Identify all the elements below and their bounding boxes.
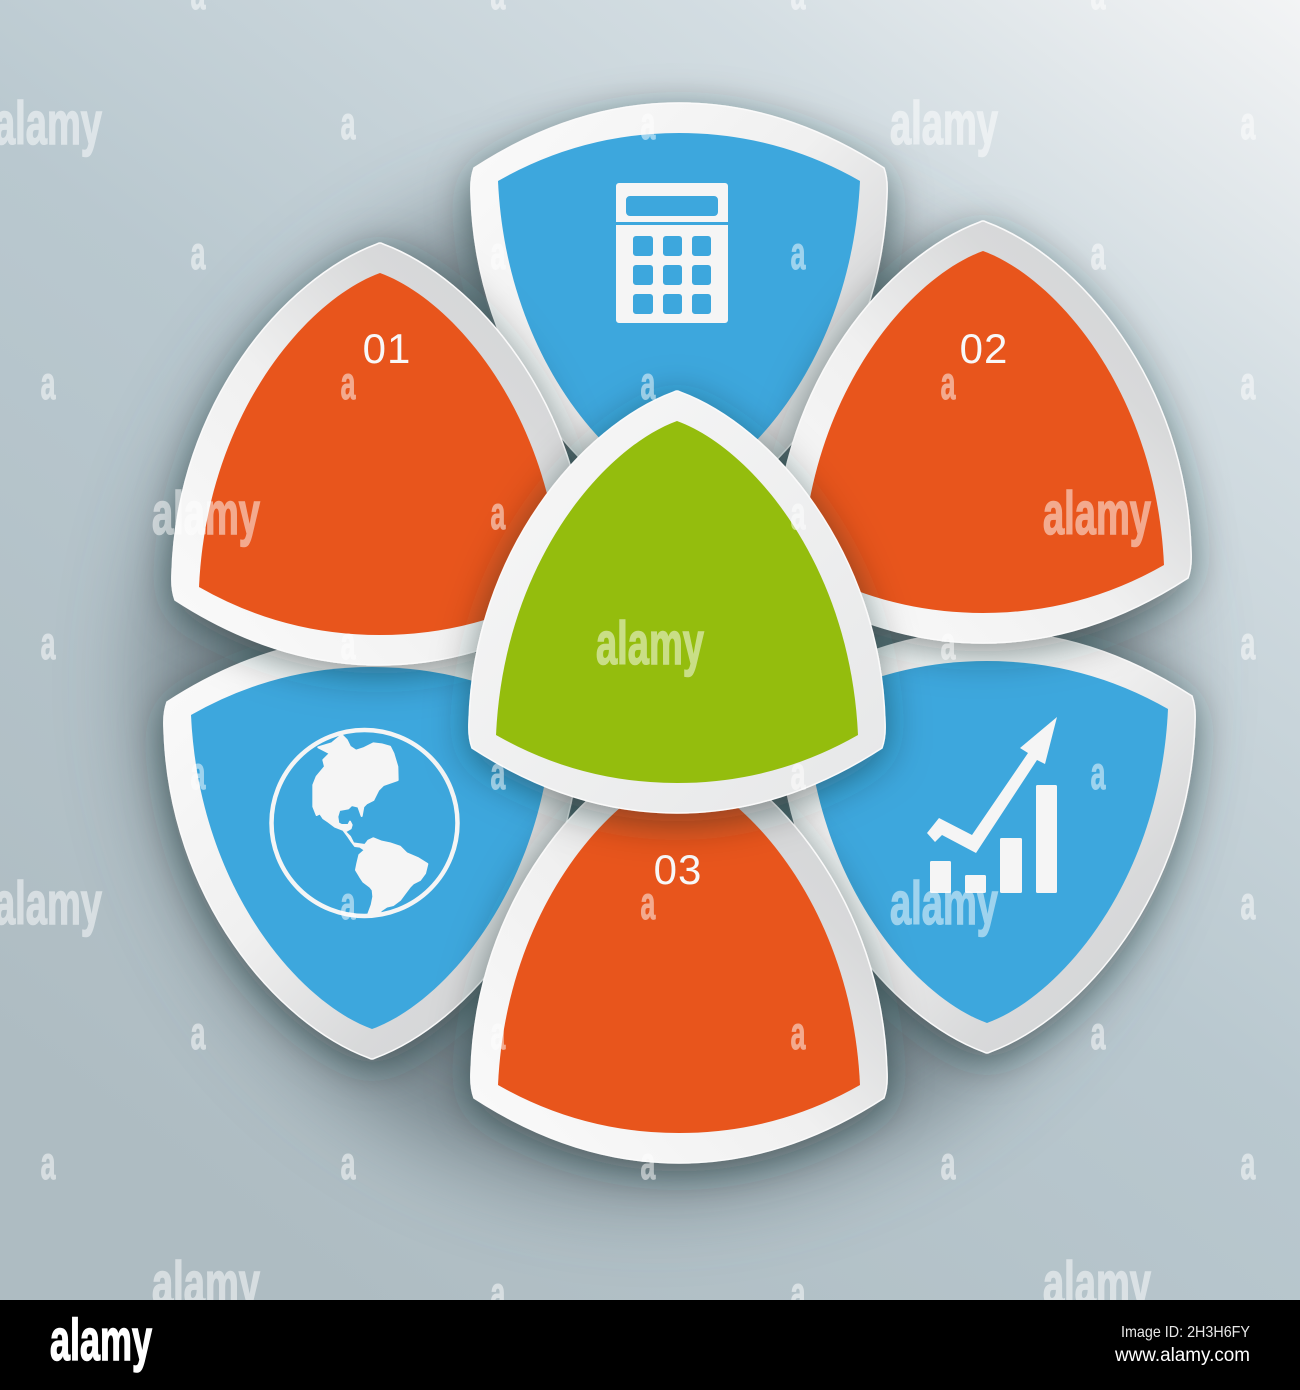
watermark: small repeated marks: a xyxy=(941,1137,956,1189)
watermark: small repeated marks: a xyxy=(1241,617,1256,669)
icon: globe xyxy=(272,730,458,916)
watermark: small repeated marks: a xyxy=(1091,1007,1106,1059)
watermark: alamy wordmarks: alamy xyxy=(890,90,998,157)
watermark: small repeated marks: a xyxy=(641,357,656,409)
watermark: small repeated marks: a xyxy=(1241,1137,1256,1189)
watermark: small repeated marks: a xyxy=(41,1137,56,1189)
footer image id: Image ID: 2H3H6FY xyxy=(1121,1324,1250,1341)
watermark: alamy wordmarks: alamy xyxy=(152,480,260,547)
panel: blue petal left with globe xyxy=(164,637,580,1059)
icon: growth chart xyxy=(927,717,1057,893)
watermark: small repeated marks: a xyxy=(941,617,956,669)
watermark: small repeated marks: a xyxy=(1241,357,1256,409)
panel: orange petal 03 xyxy=(471,741,887,1163)
footer logo: alamy xyxy=(50,1308,152,1373)
watermark: small repeated marks: a xyxy=(791,747,806,799)
watermark: small repeated marks: a xyxy=(191,747,206,799)
watermark: alamy wordmarks: alamy xyxy=(1043,480,1151,547)
watermark: small repeated marks: a xyxy=(191,227,206,279)
watermark: small repeated marks: a xyxy=(491,227,506,279)
panel: orange petal 02 xyxy=(775,221,1191,643)
panel: blue petal top with calculator xyxy=(471,103,887,525)
panel: orange petal 01 xyxy=(172,243,588,665)
label: 03: 03 xyxy=(654,846,702,893)
panel: green centre petal xyxy=(469,391,885,813)
label: 01: 01 xyxy=(363,325,411,372)
watermark: small repeated marks: a xyxy=(1241,877,1256,929)
watermark: small repeated marks: a xyxy=(791,1007,806,1059)
watermark: alamy wordmarks: alamy xyxy=(596,610,704,677)
watermark: small repeated marks: a xyxy=(941,357,956,409)
watermark: small repeated marks: a xyxy=(341,357,356,409)
footer url: www.alamy.com xyxy=(1114,1345,1250,1366)
watermark: small repeated marks: a xyxy=(41,357,56,409)
watermark: small repeated marks: a xyxy=(1091,227,1106,279)
icon: calculator xyxy=(616,183,728,323)
watermark: alamy wordmarks: alamy xyxy=(1043,1250,1151,1317)
watermark: alamy wordmarks: alamy xyxy=(152,1250,260,1317)
footer bar xyxy=(0,1300,1300,1390)
watermark: small repeated marks: a xyxy=(641,97,656,149)
label: 02: 02 xyxy=(960,325,1008,372)
watermark: small repeated marks: a xyxy=(491,1267,506,1319)
watermark: small repeated marks: a xyxy=(791,1267,806,1319)
flower soft shadow xyxy=(150,180,1160,1190)
watermark: alamy wordmarks: alamy xyxy=(890,870,998,937)
watermark: small repeated marks: a xyxy=(791,227,806,279)
watermark: small repeated marks: a xyxy=(41,617,56,669)
watermark: small repeated marks: a xyxy=(341,1137,356,1189)
watermark: small repeated marks: a xyxy=(1241,97,1256,149)
watermark: small repeated marks: a xyxy=(791,487,806,539)
watermark: small repeated marks: a xyxy=(641,1137,656,1189)
watermark: small repeated marks: a xyxy=(491,1007,506,1059)
watermark: small repeated marks: a xyxy=(491,487,506,539)
watermark: small repeated marks: a xyxy=(191,1007,206,1059)
panel: blue petal right with growth chart xyxy=(779,631,1195,1053)
watermark: small repeated marks: a xyxy=(641,877,656,929)
watermark: small repeated marks: a xyxy=(341,97,356,149)
watermark: small repeated marks: a xyxy=(491,747,506,799)
watermark: small repeated marks: a xyxy=(341,877,356,929)
watermark: small repeated marks: a xyxy=(1091,747,1106,799)
watermark: alamy wordmarks xyxy=(0,90,1151,1317)
watermark: small repeated marks: a xyxy=(341,617,356,669)
